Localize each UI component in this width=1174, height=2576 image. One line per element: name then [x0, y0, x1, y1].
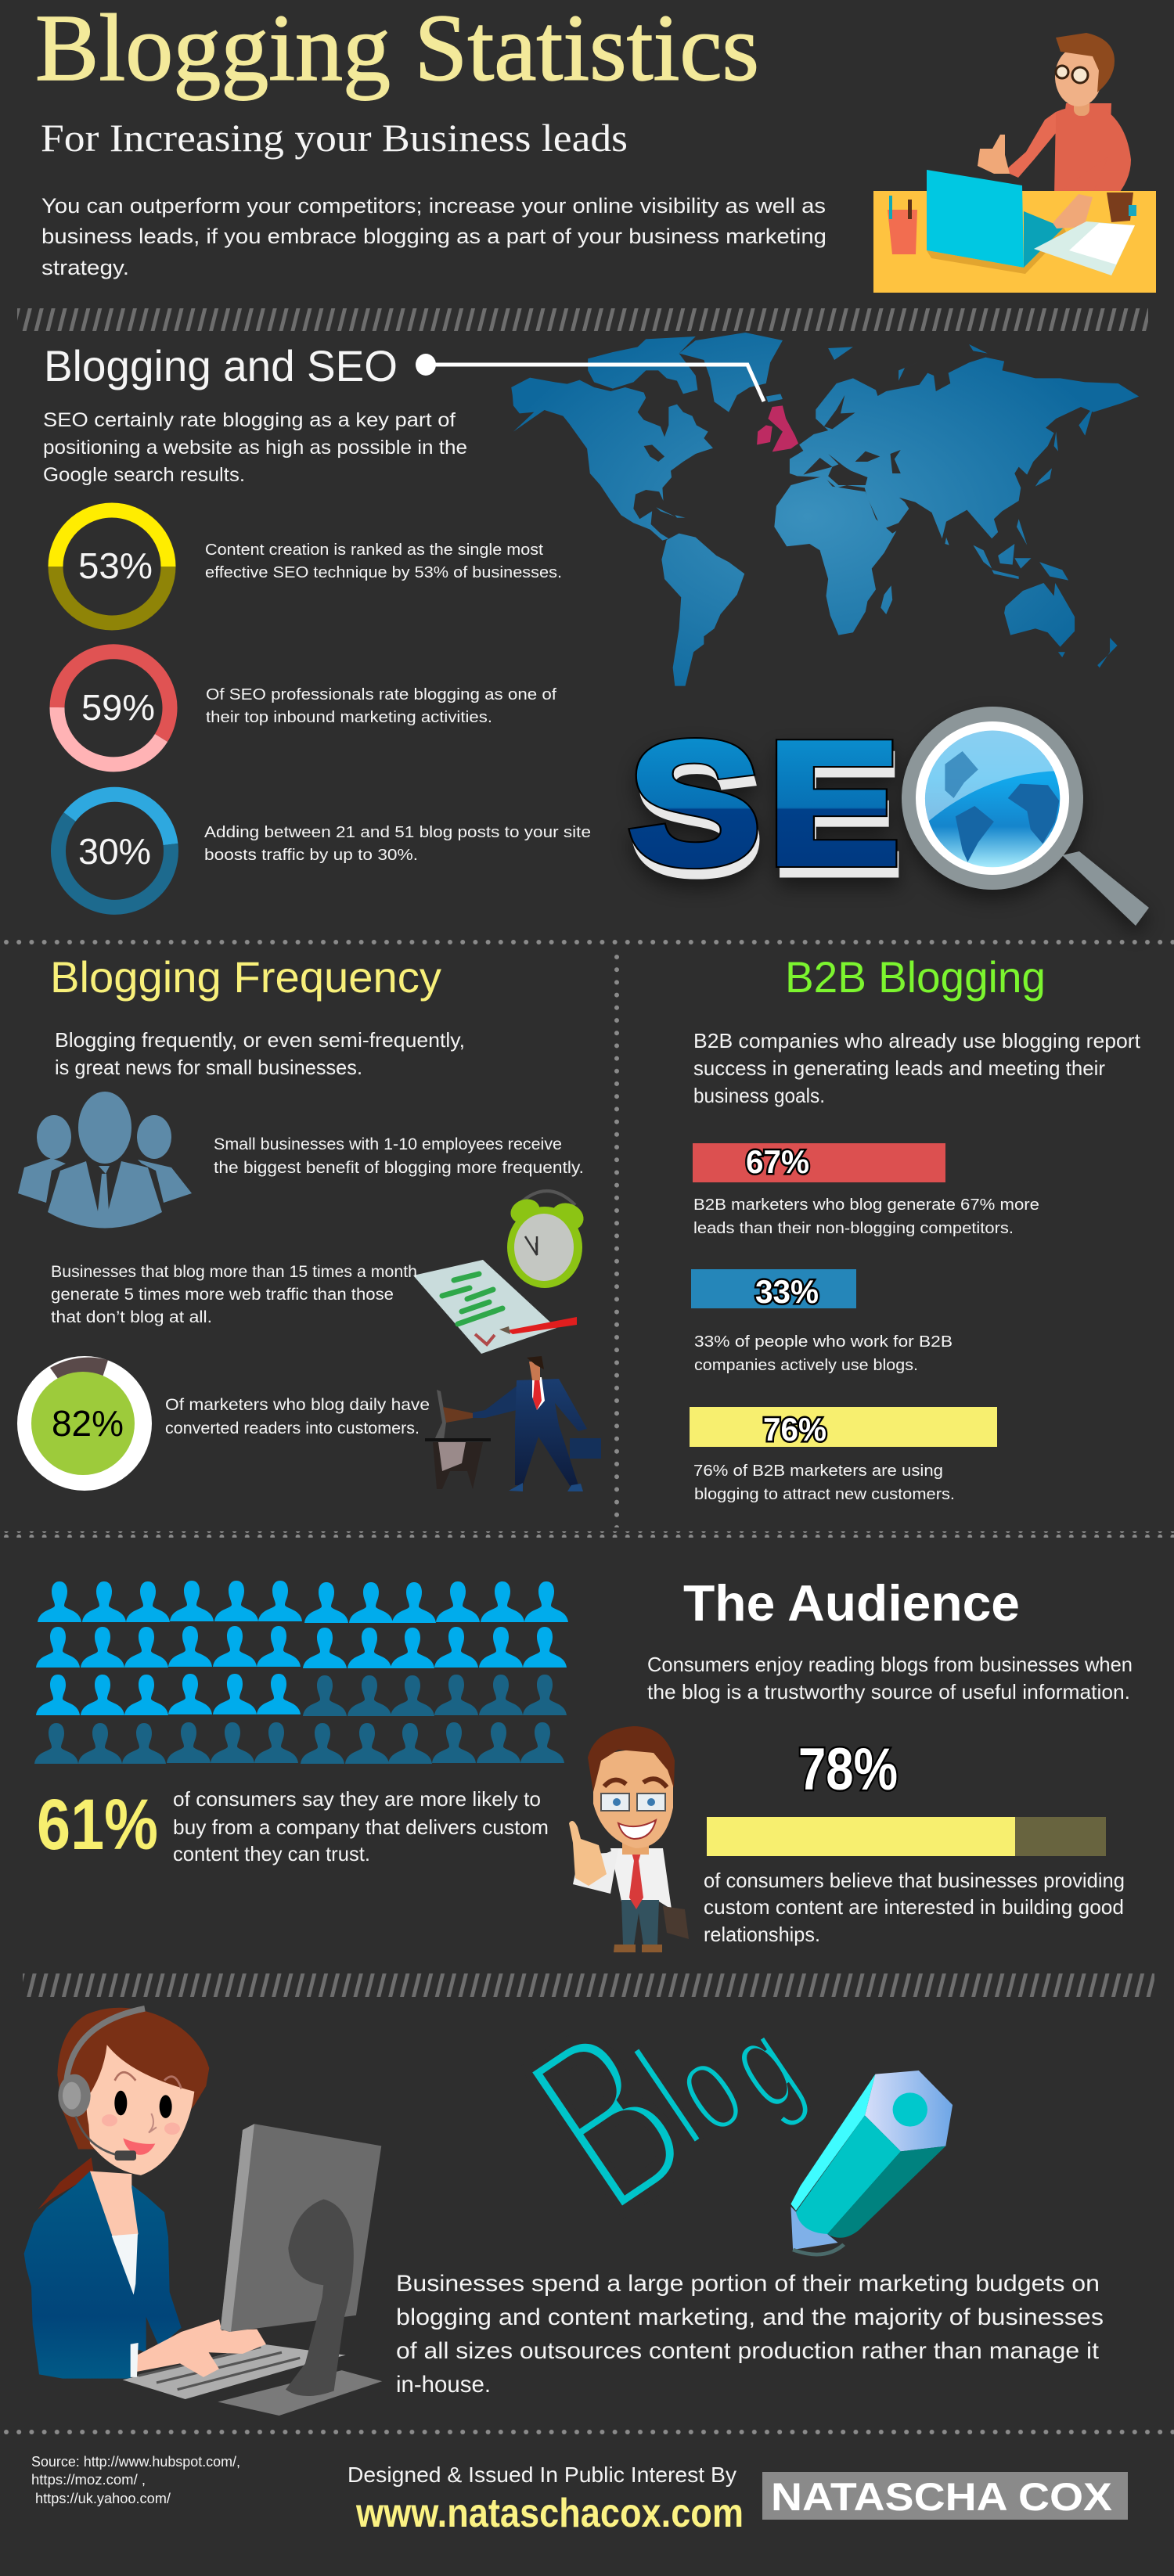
handwritten word: Blog: o: [647, 2016, 766, 2160]
intro: business goals.: [693, 1084, 825, 1107]
intro text: [41, 194, 826, 279]
heading: Blogging Frequency: [50, 952, 441, 1002]
stat: 59%: [57, 652, 556, 765]
SEO logo with magnifier: SE: [628, 707, 900, 901]
SEO paragraph: [43, 409, 467, 486]
donut chart: 82%: 82%: [52, 1403, 124, 1444]
divider: [0, 2428, 1174, 2434]
stat: 61%: 61%: [37, 1785, 158, 1865]
bar: 67%: B2B marketers who blog generate 67% more: [693, 1196, 1039, 1214]
intro: success in generating leads and meeting their: [693, 1056, 1105, 1080]
text: relationships.: [704, 1923, 820, 1946]
stat: 78%: 78%: [798, 1736, 898, 1803]
world map: [511, 333, 1139, 686]
stat: 61%: of consumers say they are more likely to: [173, 1787, 541, 1811]
progress bar: 78%: [707, 1817, 1106, 1856]
panel: closing: [24, 1901, 1104, 2416]
UK highlight: [757, 405, 798, 452]
handwritten word: Blog: g: [703, 1992, 823, 2137]
stat: 59%: their top inbound marketing activities.: [206, 709, 492, 726]
pointer line to UK: [416, 354, 764, 401]
heading: Blogging and SEO: [44, 341, 398, 390]
stat: 30%: [58, 794, 591, 907]
text: [51, 1263, 417, 1326]
bar: 67%: [693, 1143, 1039, 1237]
subtitle: For Increasing your Business leads: [41, 116, 628, 160]
illustration: man at desk with laptop: [873, 33, 1156, 293]
stat: 53%: effective SEO technique by 53% of businesses.: [205, 564, 562, 581]
text: [396, 2271, 1104, 2398]
panel: Blogging Frequency: [17, 952, 601, 1491]
section: Blogging and SEO: [43, 333, 1149, 926]
icon: business people: [18, 1092, 192, 1229]
stat: 53%: 53%: [78, 545, 153, 586]
icon: checklist and pencil: [413, 1260, 577, 1354]
intro text: business leads, if you embrace blogging as a part of your business marketing: [41, 225, 826, 248]
bar: 76%: 76% of B2B marketers are using: [693, 1462, 943, 1480]
illustration: cartoon man thumbs up: [569, 1726, 689, 1952]
credit: Designed & Issued In Public Interest By: [348, 2463, 736, 2487]
heading: The Audience: [683, 1574, 1020, 1632]
bar: 76%: [690, 1407, 997, 1503]
SEO logo with magnifier: SE: [631, 718, 902, 912]
text: Small businesses with 1-10 employees receive: [214, 1135, 562, 1153]
sources: [31, 2454, 240, 2506]
text: [214, 1135, 584, 1177]
handwritten word: Blog: B: [485, 1973, 731, 2265]
icon: pen: [790, 2071, 953, 2254]
panel: B2B Blogging: [690, 952, 1141, 1503]
SEO paragraph: positioning a website as high as possible in the: [43, 437, 467, 459]
intro: [55, 1028, 465, 1079]
panel: The Audience: [34, 1574, 1133, 1952]
stat: 30%: 30%: [78, 831, 151, 872]
intro: [693, 1029, 1141, 1107]
sources: https://uk.yahoo.com/: [35, 2491, 171, 2506]
text: Businesses that blog more than 15 times a month: [51, 1263, 417, 1281]
stat: 61%: content they can trust.: [173, 1842, 370, 1865]
text: [165, 1396, 430, 1437]
intro: B2B companies who already use blogging report: [693, 1029, 1141, 1052]
heading: B2B Blogging: [785, 952, 1046, 1002]
bar: 67%: leads than their non-blogging competitors.: [693, 1220, 1014, 1237]
sources: Source: http://www.hubspot.com/,: [31, 2454, 240, 2470]
divider: [0, 1531, 1174, 1538]
bar: 33%: [691, 1269, 953, 1374]
text: Businesses spend a large portion of their marketing budgets on: [396, 2271, 1100, 2297]
intro: Blogging frequently, or even semi-frequently,: [55, 1028, 465, 1052]
stat: 30%: boosts traffic by up to 30%.: [204, 847, 418, 864]
stat: 53%: Content creation is ranked as the single most: [205, 541, 543, 559]
text: of all sizes outsources content production rather than manage it: [396, 2338, 1100, 2364]
SEO logo with magnifier: [628, 707, 1149, 926]
intro: [647, 1653, 1133, 1704]
text: in-house.: [396, 2372, 491, 2398]
text: [704, 1869, 1125, 1946]
stat: 59%: Of SEO professionals rate blogging as one of: [206, 686, 556, 703]
SEO paragraph: SEO certainly rate blogging as a key part of: [43, 409, 456, 431]
icon: alarm clock: [507, 1191, 588, 1288]
website: www.nataschacox.com: [355, 2491, 744, 2536]
stat: 59%: 59%: [81, 687, 155, 728]
pictogram: 61% of people: [34, 1581, 568, 1764]
text: custom content are interested in building good: [704, 1895, 1124, 1919]
intro: Consumers enjoy reading blogs from businesses when: [647, 1653, 1133, 1676]
bar: 67%: 67%: [746, 1143, 809, 1180]
divider: [23, 1973, 1154, 1997]
SEO paragraph: Google search results.: [43, 464, 245, 486]
bar: 33%: 33% of people who work for B2B: [694, 1333, 953, 1351]
bar: 33%: 33%: [755, 1273, 819, 1310]
intro text: strategy.: [41, 256, 129, 279]
stat: 61%: [37, 1785, 549, 1865]
text: of consumers believe that businesses providing: [704, 1869, 1125, 1892]
bar: 76%: 76%: [763, 1411, 826, 1448]
divider: [0, 939, 1174, 945]
donut chart: 82%: [17, 1356, 152, 1491]
stat: 30%: Adding between 21 and 51 blog posts to your site: [204, 824, 591, 841]
footer: [31, 2454, 1128, 2536]
intro: the blog is a trustworthy source of useful information.: [647, 1680, 1130, 1704]
stat: 53%: [56, 510, 562, 623]
text: generate 5 times more web traffic than those: [51, 1286, 394, 1304]
text: blogging and content marketing, and the majority of businesses: [396, 2304, 1104, 2330]
bar: 76%: blogging to attract new customers.: [694, 1486, 955, 1503]
SEO logo with magnifier: SE: [628, 707, 900, 901]
text: converted readers into customers.: [165, 1419, 420, 1437]
divider: [17, 308, 1148, 331]
text: that don’t blog at all.: [51, 1308, 212, 1326]
bar: 33%: companies actively use blogs.: [694, 1357, 918, 1374]
sources: https://moz.com/ ,: [31, 2472, 146, 2488]
text: the biggest benefit of blogging more frequently.: [214, 1159, 584, 1177]
illustration: woman with headset at computer: [24, 2008, 382, 2416]
text: Of marketers who blog daily have: [165, 1396, 430, 1414]
intro text: You can outperform your competitors; increase your online visibility as well as: [41, 194, 826, 218]
logo: NATASCHA COX: [771, 2475, 1112, 2519]
stat: 61%: buy from a company that delivers custom: [173, 1815, 549, 1839]
icon: businessman shaking hand through monitor: [425, 1356, 601, 1491]
handwritten word: Blog: l: [610, 2018, 726, 2176]
intro: is great news for small businesses.: [55, 1056, 362, 1079]
